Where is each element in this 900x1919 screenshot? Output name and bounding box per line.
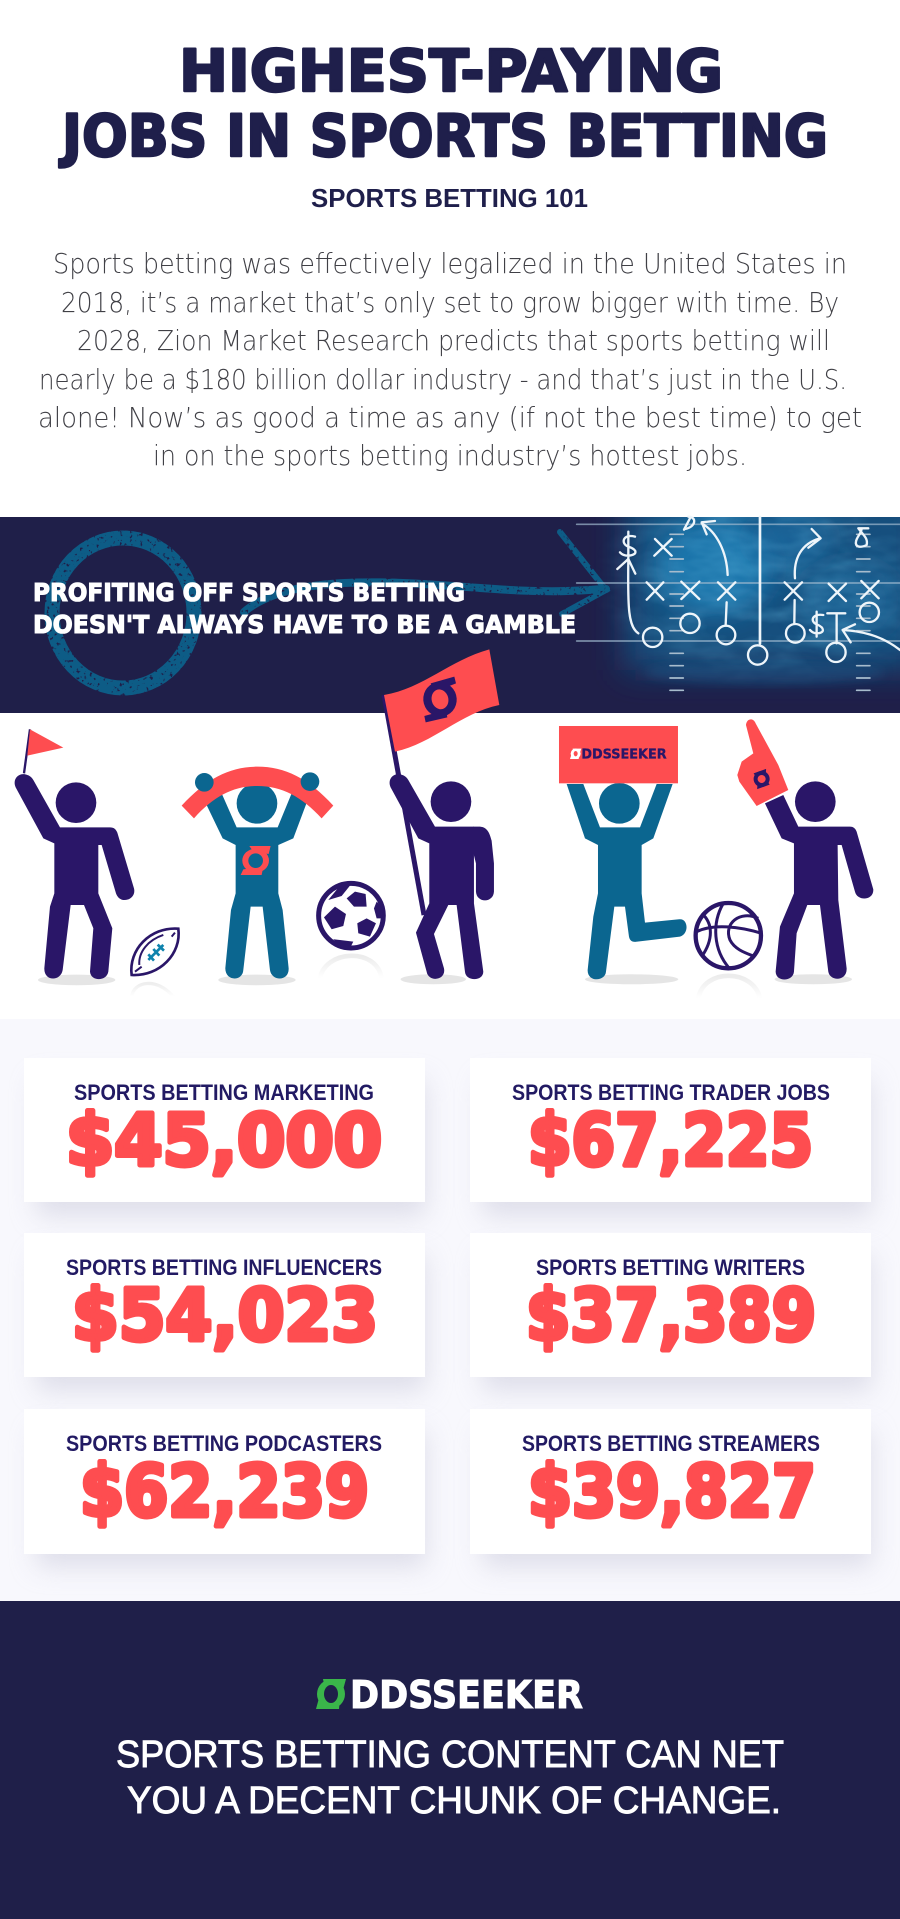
card: streamers: $39,827 [528,1450,816,1533]
card: streamers [470,1409,872,1567]
playbook glow background [606,517,900,689]
card: podcasters: SPORTS BETTING PODCASTERS [66,1431,382,1456]
chalk arrow [244,532,606,614]
play diagram [577,517,900,690]
title [58,37,828,170]
banner heading [33,578,576,639]
fans illustration [15,649,873,998]
card: trader jobs: SPORTS BETTING TRADER JOBS [512,1080,830,1105]
card: writers [470,1233,872,1391]
card: influencers: SPORTS BETTING INFLUENCERS [66,1255,382,1280]
fan 4 with sign [559,726,687,984]
fan 1 with pennant [15,729,134,985]
card: influencers [24,1233,426,1391]
footer message: YOU A DECENT CHUNK OF CHANGE. [127,1780,781,1822]
card: writers: SPORTS BETTING WRITERS [536,1255,805,1280]
soccer ball [319,883,383,978]
card: streamers: SPORTS BETTING STREAMERS [522,1431,820,1456]
Oddsseeker logo: DDSSEEKER [350,1673,583,1717]
intro paragraph: in on the sports betting industry’s hottest jobs. [153,439,747,472]
subtitle: SPORTS BETTING 101 [311,183,588,213]
football [131,929,179,997]
fan 4 with sign: DDSSEEKER [581,748,667,763]
banner heading: DOESN'T ALWAYS HAVE TO BE A GAMBLE [33,610,576,639]
intro paragraph [38,247,862,472]
banner heading: PROFITING OFF SPORTS BETTING [33,578,465,607]
title: HIGHEST-PAYING [179,37,723,105]
intro paragraph: Sports betting was effectively legalized in the United States in [53,247,847,280]
footer panel [0,1601,900,1919]
card: marketing: $45,000 [66,1099,382,1182]
fan 2 with scarf [182,767,333,985]
card: trader jobs: $67,225 [528,1099,813,1182]
card: podcasters: $62,239 [80,1450,369,1533]
intro paragraph: 2028, Zion Market Research predicts that sports betting will [77,324,830,357]
footer message: SPORTS BETTING CONTENT CAN NET [116,1734,784,1776]
fan 5 with foam finger [737,719,873,984]
card: marketing [24,1058,426,1216]
card: influencers: $54,023 [72,1274,378,1357]
basketball [696,903,762,998]
fan 3 with flag [384,649,499,984]
chalk circle [52,538,194,688]
card: writers: $37,389 [526,1274,816,1357]
card: marketing: SPORTS BETTING MARKETING [74,1080,374,1105]
salaries panel [0,1019,900,1601]
card: podcasters [24,1409,426,1567]
banner panel [0,516,900,713]
card: trader jobs [470,1058,872,1216]
title: JOBS IN SPORTS BETTING [58,102,828,170]
footer message [116,1734,784,1822]
